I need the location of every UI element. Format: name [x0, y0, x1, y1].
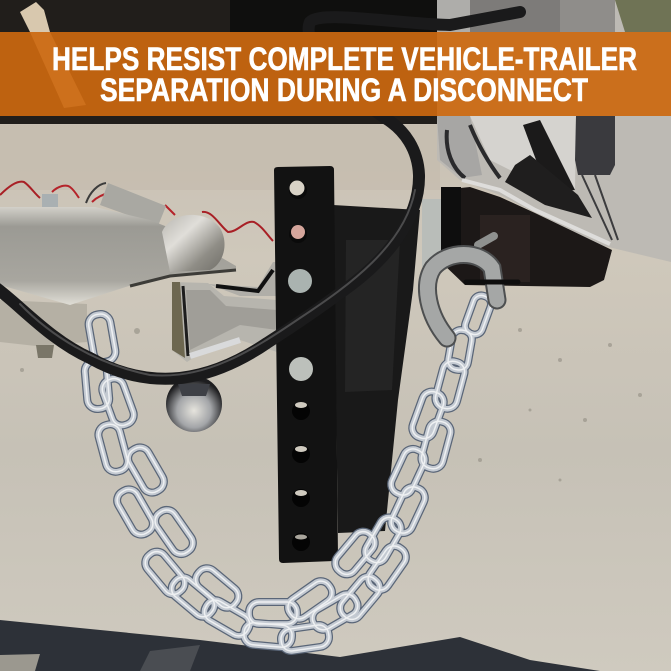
black electrical cable: [0, 12, 520, 379]
banner heading: [52, 41, 637, 108]
hole 3: [292, 402, 310, 420]
ground shadow: [0, 620, 600, 671]
coupler wires: [0, 182, 273, 241]
bolt lower: [289, 357, 313, 381]
hole 2: [289, 225, 307, 243]
chrome bumper: [437, 0, 671, 262]
receiver bracket under bumper: [422, 187, 612, 287]
hole 1: [289, 180, 307, 199]
clevis hook: [428, 236, 518, 338]
dark background at top: [0, 0, 440, 124]
hole 5: [292, 489, 310, 507]
hole 4: [292, 445, 310, 463]
hitch ball: [166, 376, 222, 432]
hole 6: [292, 533, 310, 551]
bolt upper: [288, 269, 312, 293]
trailer coupler: [0, 183, 236, 358]
coupler ball cap: [162, 215, 225, 272]
orange banner: [0, 32, 671, 116]
rear support bracket: [333, 205, 420, 533]
ball mount shank: [172, 262, 278, 362]
safety chain: [84, 293, 493, 652]
vertical drop plate with holes: [274, 166, 338, 563]
